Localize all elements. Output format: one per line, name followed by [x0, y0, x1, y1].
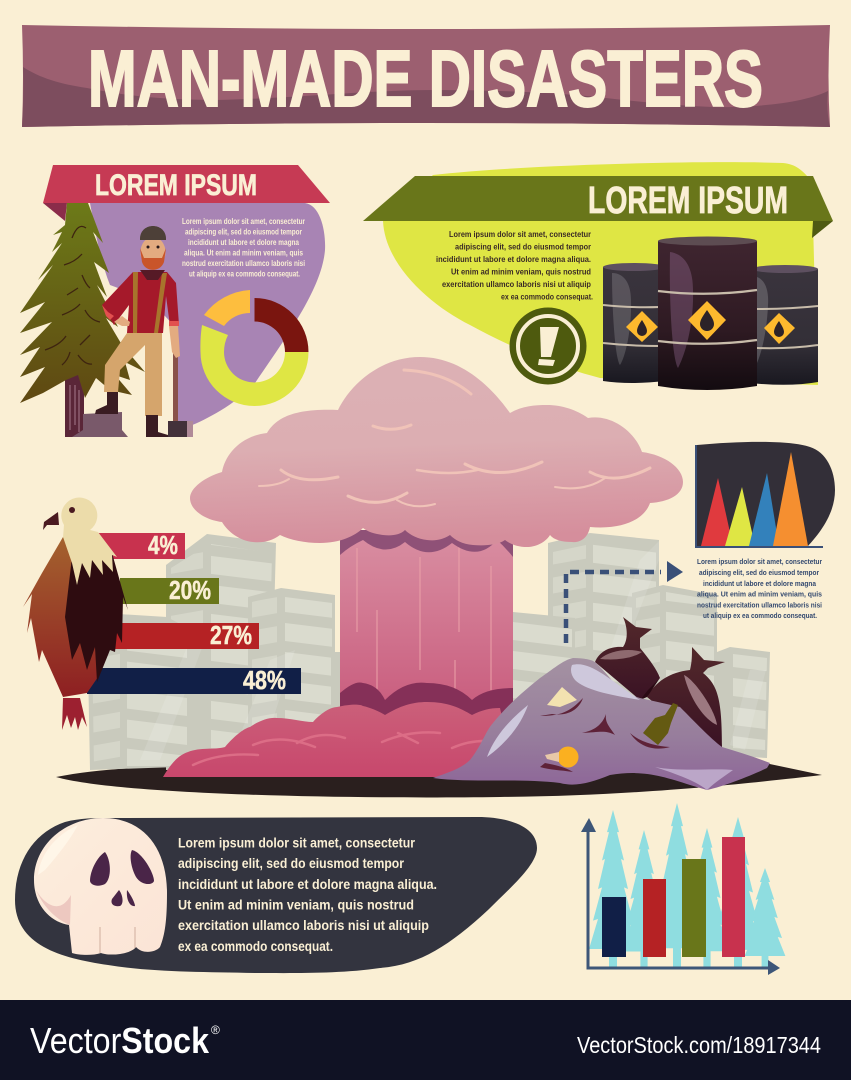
green heading ribbon	[363, 176, 833, 238]
forest bar chart	[581, 803, 785, 975]
panel text: nostrud exercitation ullamco laboris nisi	[182, 259, 305, 268]
head	[140, 237, 166, 267]
percentage bars	[87, 530, 301, 695]
pine silhouettes	[589, 803, 785, 968]
panel text	[182, 217, 305, 278]
icon: skull	[34, 818, 167, 955]
mushroom column	[340, 530, 513, 730]
panel text: exercitation ullamco laboris nisi ut aliquip	[442, 279, 591, 289]
dashed arrow	[566, 561, 683, 643]
red heading ribbon	[43, 165, 330, 221]
chart caption: aliqua. Ut enim ad minim veniam, quis	[697, 590, 822, 598]
red heading ribbon: LOREM IPSUM	[95, 169, 257, 202]
callout text	[178, 834, 437, 954]
panel text: Lorem ipsum dolor sit amet, consectetur	[182, 217, 305, 226]
callout text: Ut enim ad minim veniam, quis nostrud	[178, 896, 414, 912]
panel text	[436, 229, 593, 302]
paper scrap	[547, 687, 577, 707]
triangle chart panel	[696, 442, 835, 547]
panel text: adipiscing elit, sed do eiusmod tempor	[185, 228, 302, 236]
chart caption: adipiscing elit, sed do eiusmod tempor	[699, 568, 819, 577]
legs	[104, 333, 162, 416]
axes	[581, 818, 780, 975]
panel: deforestation	[20, 165, 330, 437]
percentage bars: 27%	[210, 620, 252, 650]
panel text: incididunt ut labore et dolore magna	[188, 238, 299, 247]
chart caption: nostrud exercitation ullamco laboris nisi	[697, 600, 822, 610]
green heading ribbon: LOREM IPSUM	[588, 180, 788, 222]
panel text: Lorem ipsum dolor sit amet, consectetur	[449, 229, 592, 239]
buildings: right group	[513, 533, 770, 758]
percentage bars: 48%	[243, 665, 286, 695]
trash pile	[433, 658, 770, 790]
torso	[102, 272, 179, 333]
stump	[72, 412, 128, 437]
panel text: Ut enim ad minim veniam, quis nostrud	[451, 266, 591, 276]
callout text: ex ea commodo consequat.	[178, 938, 333, 954]
callout text: Lorem ipsum dolor sit amet, consectetur	[178, 834, 415, 850]
trash bags	[595, 617, 725, 747]
footer logo: VectorStock	[30, 1020, 210, 1061]
footer url: VectorStock.com/18917344	[577, 1032, 821, 1058]
callout text: incididunt ut labore et dolore magna aliqua.	[178, 876, 437, 892]
title banner	[22, 25, 830, 127]
callout text: exercitation ullamco laboris nisi ut aliquip	[178, 917, 429, 933]
panel text: ex ea commodo consequat.	[501, 292, 593, 302]
mound highlights	[193, 732, 490, 765]
right barrel	[750, 265, 818, 385]
bars	[602, 897, 626, 957]
callout text: adipiscing elit, sed do eiusmod tempor	[178, 855, 404, 871]
bottle	[643, 703, 678, 745]
panel text: aliqua. Ut enim ad minim veniam, quis	[184, 248, 303, 258]
purple backdrop	[90, 203, 325, 430]
registered mark: ®	[211, 1023, 220, 1037]
axe	[168, 343, 193, 437]
panel: oil barrels	[363, 162, 833, 390]
bulb	[545, 746, 578, 768]
chart caption: incididunt ut labore et dolore magna	[703, 579, 817, 588]
percentage bars: 20%	[169, 575, 211, 605]
pine tree	[20, 203, 145, 437]
panel text: ut aliquip ex ea commodo consequat.	[189, 270, 300, 278]
chart caption	[697, 557, 822, 620]
chart caption: Lorem ipsum dolor sit amet, consectetur	[697, 557, 822, 566]
cloud highlights	[259, 370, 650, 506]
buildings: left group	[87, 534, 341, 770]
icon: warning	[510, 308, 586, 384]
ground shadow	[56, 762, 822, 797]
footer bar	[0, 1000, 851, 1080]
left barrel	[603, 263, 665, 383]
panel text: adipiscing elit, sed do eiusmod tempor	[455, 242, 592, 252]
mushroom cloud	[190, 357, 683, 547]
center barrel	[658, 236, 757, 390]
mound of fallout	[163, 702, 515, 777]
donut chart	[200, 290, 308, 406]
panel text: incididunt ut labore et dolore magna aliqua.	[436, 254, 591, 264]
percentage bars: 4%	[148, 530, 178, 560]
lime backdrop	[383, 162, 818, 385]
debris cracks	[540, 698, 670, 772]
lumberjack	[72, 226, 193, 437]
panel: skull callout	[15, 817, 537, 973]
icon: vulture	[23, 498, 128, 730]
chart caption: ut aliquip ex ea commodo consequat.	[703, 611, 817, 620]
